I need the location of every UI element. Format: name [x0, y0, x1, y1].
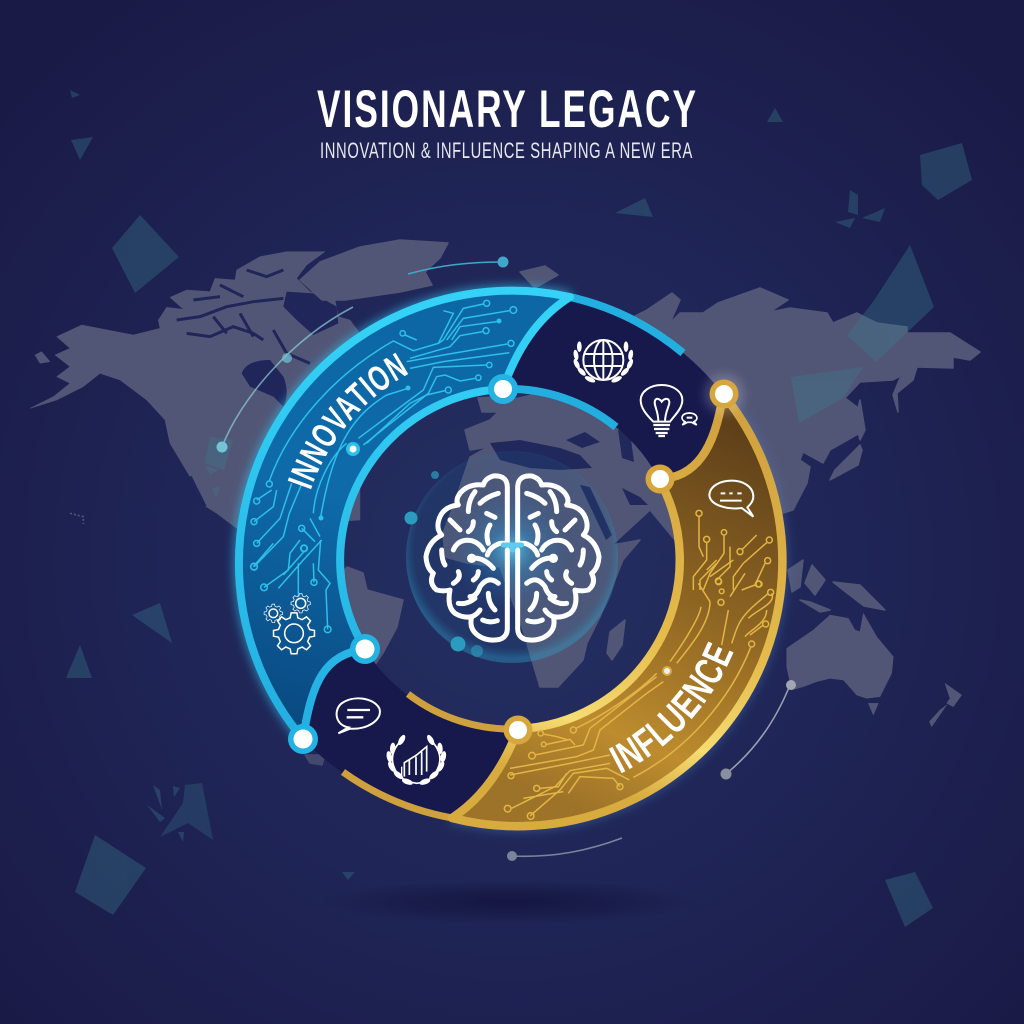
icon: gears — [264, 594, 314, 654]
node: blue mid — [350, 634, 380, 664]
shadow below ring — [320, 880, 700, 924]
circuit traces: innovation upper — [251, 300, 517, 575]
title: VISIONARY LEGACY — [317, 80, 698, 139]
label: innovation: INNOVATION — [288, 352, 408, 490]
map: south america — [320, 567, 403, 700]
node: gold bottom — [504, 716, 532, 744]
panel: influence segment — [448, 403, 787, 830]
arc: lower right — [720, 680, 796, 780]
panel: navy top segment — [503, 297, 723, 479]
label: influence: INFLUENCE — [608, 642, 734, 774]
node: gold mid — [646, 464, 674, 494]
node: blue bottom — [288, 724, 318, 754]
panel: innovation segment — [234, 286, 574, 730]
icon: brain — [426, 476, 599, 640]
thin orbit arcs — [216, 256, 796, 861]
map: japan — [830, 400, 865, 480]
icon: small speech bubble — [682, 413, 697, 425]
arc: bottom — [507, 838, 622, 861]
influence inner dot — [662, 666, 672, 676]
map: south america tip — [305, 755, 325, 765]
map: australia — [787, 613, 962, 727]
arc: top — [408, 256, 508, 274]
central brain halo — [406, 451, 618, 663]
icon: light bulb — [641, 385, 682, 436]
circuit traces: innovation lower — [251, 540, 331, 633]
map: southeast asia islands — [788, 560, 885, 612]
icon: laurel with chart — [386, 734, 447, 786]
map: seas — [490, 430, 648, 540]
innovation bright dot — [318, 318, 502, 520]
circuit traces: influence lower — [504, 560, 774, 819]
map: madagascar — [607, 620, 625, 660]
map: greenland — [300, 240, 448, 300]
brain left hemisphere — [426, 476, 507, 640]
map: north america — [30, 252, 360, 528]
node: gold top — [704, 374, 744, 414]
panel: navy bottom segment — [303, 649, 518, 818]
arc: upper left — [216, 307, 353, 452]
brain right hemisphere — [518, 476, 599, 640]
subtitle: INNOVATION & INFLUENCE SHAPING A NEW ERA — [320, 138, 693, 163]
connector nodes — [288, 374, 744, 754]
circuit traces: influence upper — [693, 510, 772, 590]
icon: chat bubble — [709, 481, 753, 517]
icon: globe with laurel — [572, 340, 634, 384]
map: kamchatka — [893, 367, 917, 412]
halo dots — [404, 471, 483, 657]
map: eurasia and africa — [443, 288, 980, 687]
ring glow — [239, 291, 782, 826]
icon: speech bubble — [337, 698, 380, 733]
map: british isles — [478, 396, 506, 412]
node: blue top — [488, 374, 518, 404]
floating shards — [66, 90, 972, 927]
world map — [30, 240, 980, 765]
map: iceland — [520, 266, 558, 288]
